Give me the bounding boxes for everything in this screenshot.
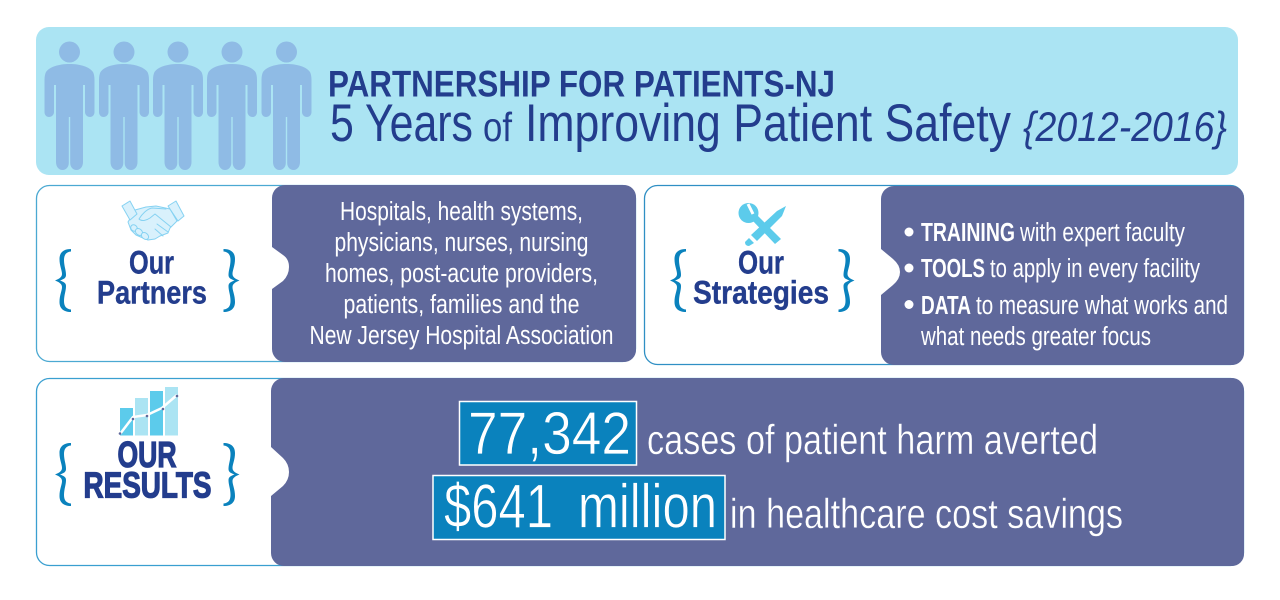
heading: Our Strategies: Our: [738, 244, 784, 280]
title: [328, 64, 1227, 153]
title: 5 Years: [330, 94, 473, 153]
bracket: right: [838, 249, 854, 312]
icon: rising bar chart with line: [119, 387, 178, 436]
heading: Our Partners: Partners: [97, 274, 207, 310]
title: {2012-2016}: [1023, 103, 1227, 150]
strategies list: DATA: [921, 292, 971, 320]
partners list: homes, post-acute providers,: [325, 260, 598, 288]
results text panel: [271, 378, 1244, 566]
bracket: left: [55, 249, 71, 312]
panel: our results: [36, 378, 1244, 566]
partners list: [310, 198, 614, 350]
bracket: right: [224, 443, 240, 506]
icon: wrench and pencil: [738, 203, 786, 246]
strategies list: what needs greater focus: [920, 323, 1151, 351]
stat: cost savings: million: [578, 472, 717, 542]
panel: our strategies: [644, 186, 1244, 365]
bracket: right: [224, 249, 240, 312]
heading: Our Strategies: [693, 244, 829, 310]
panel: our partners: [36, 185, 636, 362]
partners list: patients, families and the: [344, 291, 580, 319]
stat: cost savings: in healthcare cost savings: [730, 490, 1123, 537]
title: PARTNERSHIP FOR PATIENTS-NJ: [328, 64, 835, 104]
partners list: New Jersey Hospital Association: [310, 322, 614, 350]
strategies list: to measure what works and: [976, 292, 1228, 320]
partners list: Hospitals, health systems,: [340, 198, 583, 226]
strategies list: to apply in every facility: [990, 255, 1200, 283]
strategies list: [904, 219, 1228, 351]
partners list: physicians, nurses, nursing: [334, 229, 588, 257]
strategies list: with expert faculty: [1019, 219, 1185, 247]
stat: cases averted: cases of patient harm averted: [647, 416, 1098, 463]
heading: Our Partners: Our: [129, 244, 174, 280]
title: of: [483, 104, 513, 150]
icon: handshake: [122, 201, 184, 241]
stat: cost savings: [433, 472, 1123, 542]
header banner: [36, 27, 1238, 175]
strategies list: TOOLS: [921, 255, 985, 283]
icon: row of five people: [44, 42, 312, 170]
bracket: left: [670, 249, 686, 312]
stat: cases averted: [460, 400, 1098, 467]
partners text panel: [272, 185, 636, 362]
heading: Our Partners: [97, 244, 207, 310]
heading: Our Results: OUR: [118, 434, 176, 475]
strategies text panel: [881, 186, 1244, 365]
heading: Our Results: RESULTS: [84, 464, 212, 506]
bracket: left: [55, 443, 71, 506]
title: Improving Patient Safety: [525, 94, 1011, 153]
strategies list: TRAINING: [921, 219, 1015, 247]
heading: Our Strategies: Strategies: [693, 274, 829, 310]
heading: Our Results: [84, 434, 212, 506]
stat: cases averted: 77,342: [468, 400, 631, 467]
stat: cost savings: $641: [444, 472, 553, 542]
